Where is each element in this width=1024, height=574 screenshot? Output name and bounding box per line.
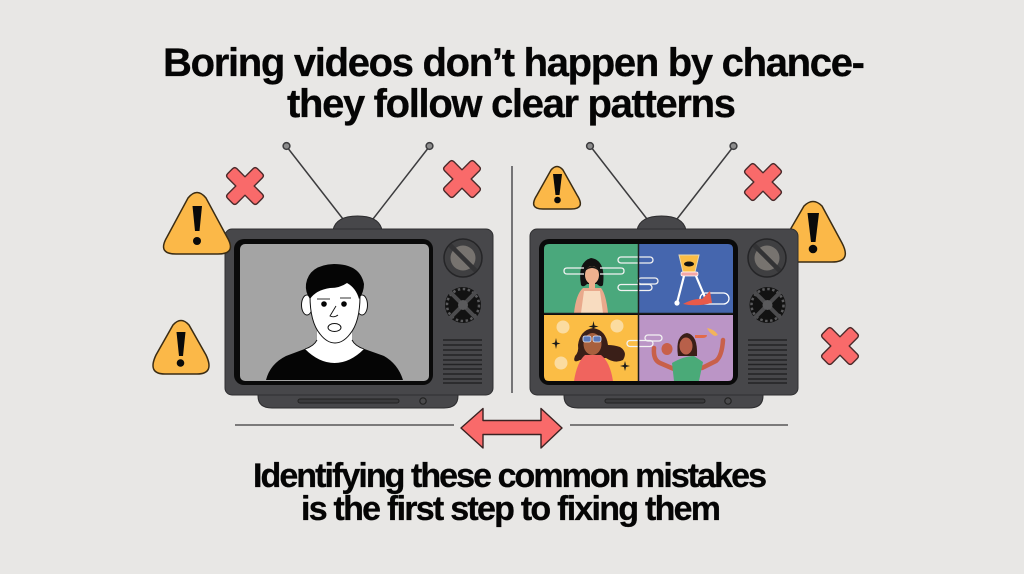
screen xyxy=(240,244,429,381)
panel: engaging television xyxy=(530,143,798,408)
speaker vent xyxy=(443,340,482,383)
title: they follow clear patterns xyxy=(287,82,736,126)
center divider line xyxy=(511,166,513,393)
speaker vent xyxy=(748,340,787,383)
control: dial knob xyxy=(748,239,786,277)
illustration: compass figure on blue panel xyxy=(674,255,729,306)
control: speaker wheel xyxy=(445,287,481,323)
quadrant: green xyxy=(544,244,638,313)
quadrant: yellow xyxy=(544,315,638,381)
icon: warning triangle small right xyxy=(534,166,580,209)
arrow: two-way comparison xyxy=(461,408,562,448)
icon: red x left two xyxy=(432,149,492,209)
icon: red x right two xyxy=(810,316,870,376)
icon: red x left one xyxy=(215,156,275,216)
title: Boring videos don’t happen by chance- xyxy=(163,41,865,85)
panel: boring television xyxy=(225,143,493,408)
baseline rule left xyxy=(235,424,454,426)
icon: warning triangle large left xyxy=(164,192,230,254)
speech lines across the screen xyxy=(564,257,662,346)
antenna dome xyxy=(333,216,382,230)
screen bezel xyxy=(539,239,738,385)
control: dial knob xyxy=(444,239,482,277)
closing statement xyxy=(253,457,767,528)
screen bezel xyxy=(234,239,433,385)
control: speaker wheel xyxy=(750,287,786,323)
tv body xyxy=(225,229,493,395)
person: woman on green panel xyxy=(580,258,604,289)
title xyxy=(163,41,865,126)
closing statement: is the first step to fixing them xyxy=(301,490,721,528)
tv base xyxy=(258,394,458,408)
screen dividers xyxy=(544,244,733,381)
closing statement: Identifying these common mistakes xyxy=(253,457,767,495)
icon: antennas xyxy=(283,143,433,219)
person: plain talking head xyxy=(266,264,403,380)
quadrant: blue xyxy=(639,244,733,313)
tv body xyxy=(530,229,798,395)
icon: warning triangle small left xyxy=(153,320,209,374)
quadrant: purple xyxy=(639,315,733,381)
icon: red x right one xyxy=(733,152,793,212)
icon: antennas xyxy=(587,143,737,219)
antenna dome xyxy=(637,216,686,230)
icon: warning triangle large right xyxy=(780,202,845,262)
tv base xyxy=(564,394,763,408)
baseline rule right xyxy=(570,424,788,426)
